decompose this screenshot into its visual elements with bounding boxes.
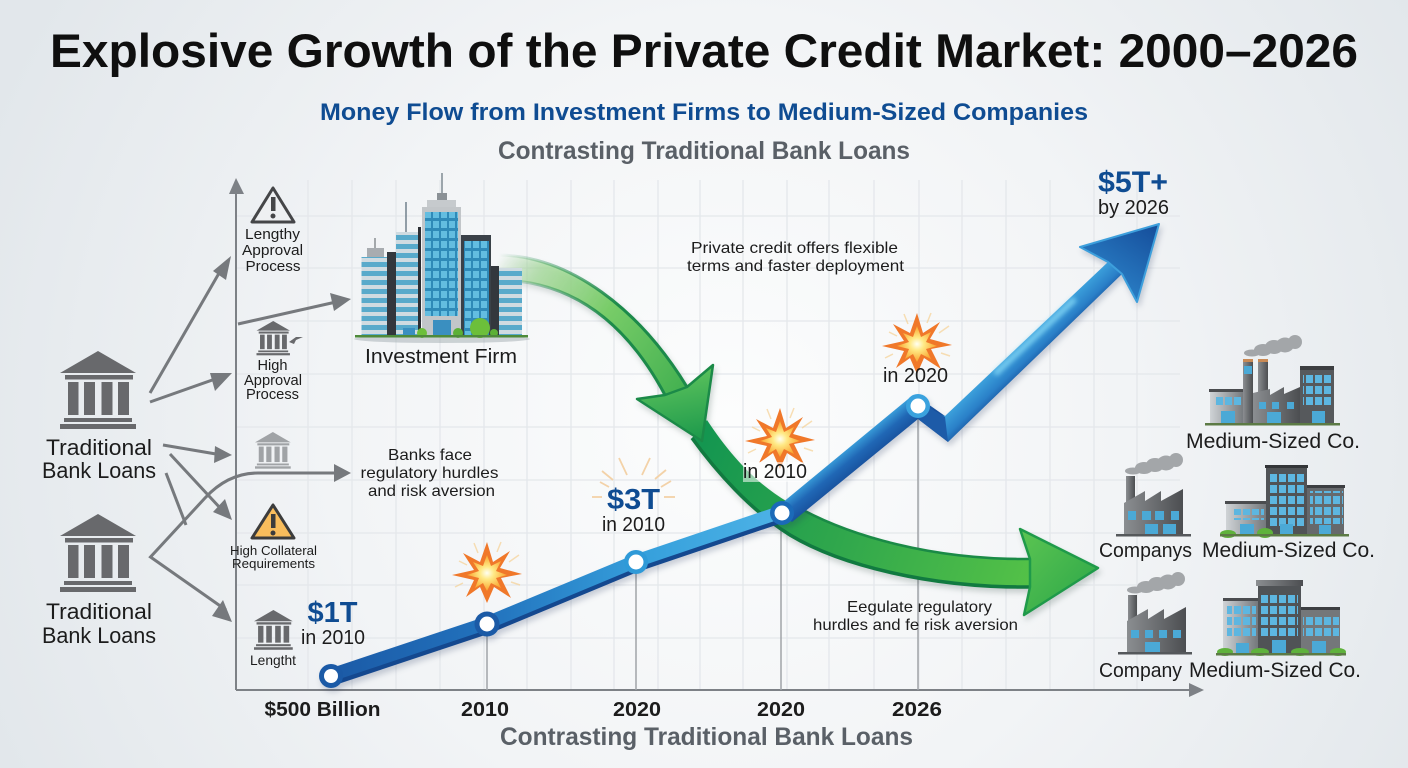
text: private credit benefits: terms and faster deployment xyxy=(687,258,905,275)
panel: medium-sized companies xyxy=(1099,335,1375,682)
text: regulatory note: hurdles and fe risk aversion xyxy=(813,617,1018,634)
barrier: length: Lengtht xyxy=(250,652,296,668)
barrier: lengthy approval process: Process xyxy=(246,258,300,275)
barrier: high approval process: High xyxy=(258,358,288,374)
label: medium-sized co. bottom: Medium-Sized Co. xyxy=(1189,659,1361,682)
green arrow lower band xyxy=(692,420,1098,615)
arrow: green money flow xyxy=(497,255,1098,615)
title: Explosive Growth of the Private Credit Market: 2000–2026 xyxy=(50,24,1358,77)
label: traditional bank loans 2 xyxy=(42,599,156,648)
subtitle: contrasting bank loans: Contrasting Traditional Bank Loans xyxy=(498,137,910,165)
label: traditional bank loans 1 xyxy=(42,435,156,483)
icon: investment firm building xyxy=(354,173,530,343)
barrier: lengthy approval process: Lengthy xyxy=(245,226,301,243)
subtitle: money flow: Money Flow from Investment Firms to Medium-Sized Companies xyxy=(320,99,1088,126)
green arrow upper band xyxy=(497,255,713,441)
callout: $5T+ by 2026 xyxy=(1098,166,1169,219)
callout: $1T in 2010 xyxy=(301,597,365,649)
label: medium-sized co. middle: Medium-Sized Co. xyxy=(1202,539,1375,562)
chart axes xyxy=(229,178,1204,697)
barrier: high approval process: Process xyxy=(246,387,299,403)
text: banks face regulatory hurdles xyxy=(360,447,498,500)
callout: $5T+ by 2026: by 2026 xyxy=(1098,197,1169,219)
icon: factory middle xyxy=(1116,453,1191,536)
callout: in 2010 at explosion: in 2010 xyxy=(743,461,807,483)
x axis labels xyxy=(264,699,942,721)
callout: $3T in 2010: $3T xyxy=(607,484,660,516)
icon: factory top right xyxy=(1205,335,1340,426)
text: private credit benefits: Private credit offers flexible xyxy=(691,240,898,257)
arrows: bank loans to barriers xyxy=(150,256,351,622)
barrier: lengthy approval process xyxy=(242,188,303,275)
barrier: high approval process xyxy=(244,321,303,403)
label: traditional bank loans 1: Bank Loans xyxy=(42,458,156,483)
callout: in 2020 at explosion: in 2020 xyxy=(883,365,948,387)
label: companys: Companys xyxy=(1099,540,1192,562)
label: company: Company xyxy=(1099,660,1182,682)
text: banks face regulatory hurdles: regulatory hurdles xyxy=(360,465,498,482)
text: regulatory note: Eegulate regulatory xyxy=(847,599,992,616)
text: regulatory note xyxy=(813,599,1018,634)
callout: $1T in 2010: in 2010 xyxy=(301,627,365,649)
callout: $3T in 2010: in 2010 xyxy=(602,514,665,536)
label: investment firm: Investment Firm xyxy=(365,346,517,368)
lower line segments xyxy=(331,512,781,679)
callout: $1T in 2010: $1T xyxy=(308,597,358,629)
callout: $3T in 2010 xyxy=(592,458,675,536)
label: medium-sized co. top: Medium-Sized Co. xyxy=(1186,430,1360,453)
label: traditional bank loans 2: Bank Loans xyxy=(42,623,156,648)
barrier: high approval process: Approval xyxy=(244,373,302,389)
x axis labels: 2020 xyxy=(757,699,805,721)
icon: bank 2 xyxy=(60,514,136,592)
icon: faded bank xyxy=(255,432,291,469)
barrier: length xyxy=(250,610,296,668)
x axis caption: Contrasting Traditional Bank Loans xyxy=(500,723,913,751)
barrier: lengthy approval process: Approval xyxy=(242,242,303,259)
icon: explosion 2 xyxy=(745,408,815,469)
barrier: high collateral requirements xyxy=(230,505,317,571)
icon: factory bottom xyxy=(1118,572,1192,654)
icon: office building middle xyxy=(1220,465,1349,538)
label: traditional bank loans 1: Traditional xyxy=(46,435,152,460)
icon: office building bottom xyxy=(1216,580,1346,656)
x axis labels: 2010 xyxy=(461,699,509,721)
callout: $5T+ by 2026: $5T+ xyxy=(1098,166,1168,199)
barrier: high collateral requirements: High Collateral xyxy=(230,543,317,558)
icon: bank 1 xyxy=(60,351,136,429)
panel: traditional bank loans (left) xyxy=(42,351,156,648)
text: banks face regulatory hurdles: and risk aversion xyxy=(368,483,495,500)
barrier: high collateral requirements: Requirements xyxy=(232,556,316,571)
icon: explosion 3 xyxy=(882,313,952,374)
text: banks face regulatory hurdles: Banks face xyxy=(388,447,472,464)
x axis labels: $500 Billion xyxy=(264,699,380,721)
x axis labels: 2026 xyxy=(892,699,942,721)
icon: explosion 1 xyxy=(452,542,522,603)
label: traditional bank loans 2: Traditional xyxy=(46,599,152,624)
data point markers xyxy=(319,394,930,688)
text: private credit benefits xyxy=(687,240,905,275)
blue growth line xyxy=(319,224,1159,688)
x axis labels: 2020 xyxy=(613,699,661,721)
upper shaft and arrowhead xyxy=(776,224,1159,522)
